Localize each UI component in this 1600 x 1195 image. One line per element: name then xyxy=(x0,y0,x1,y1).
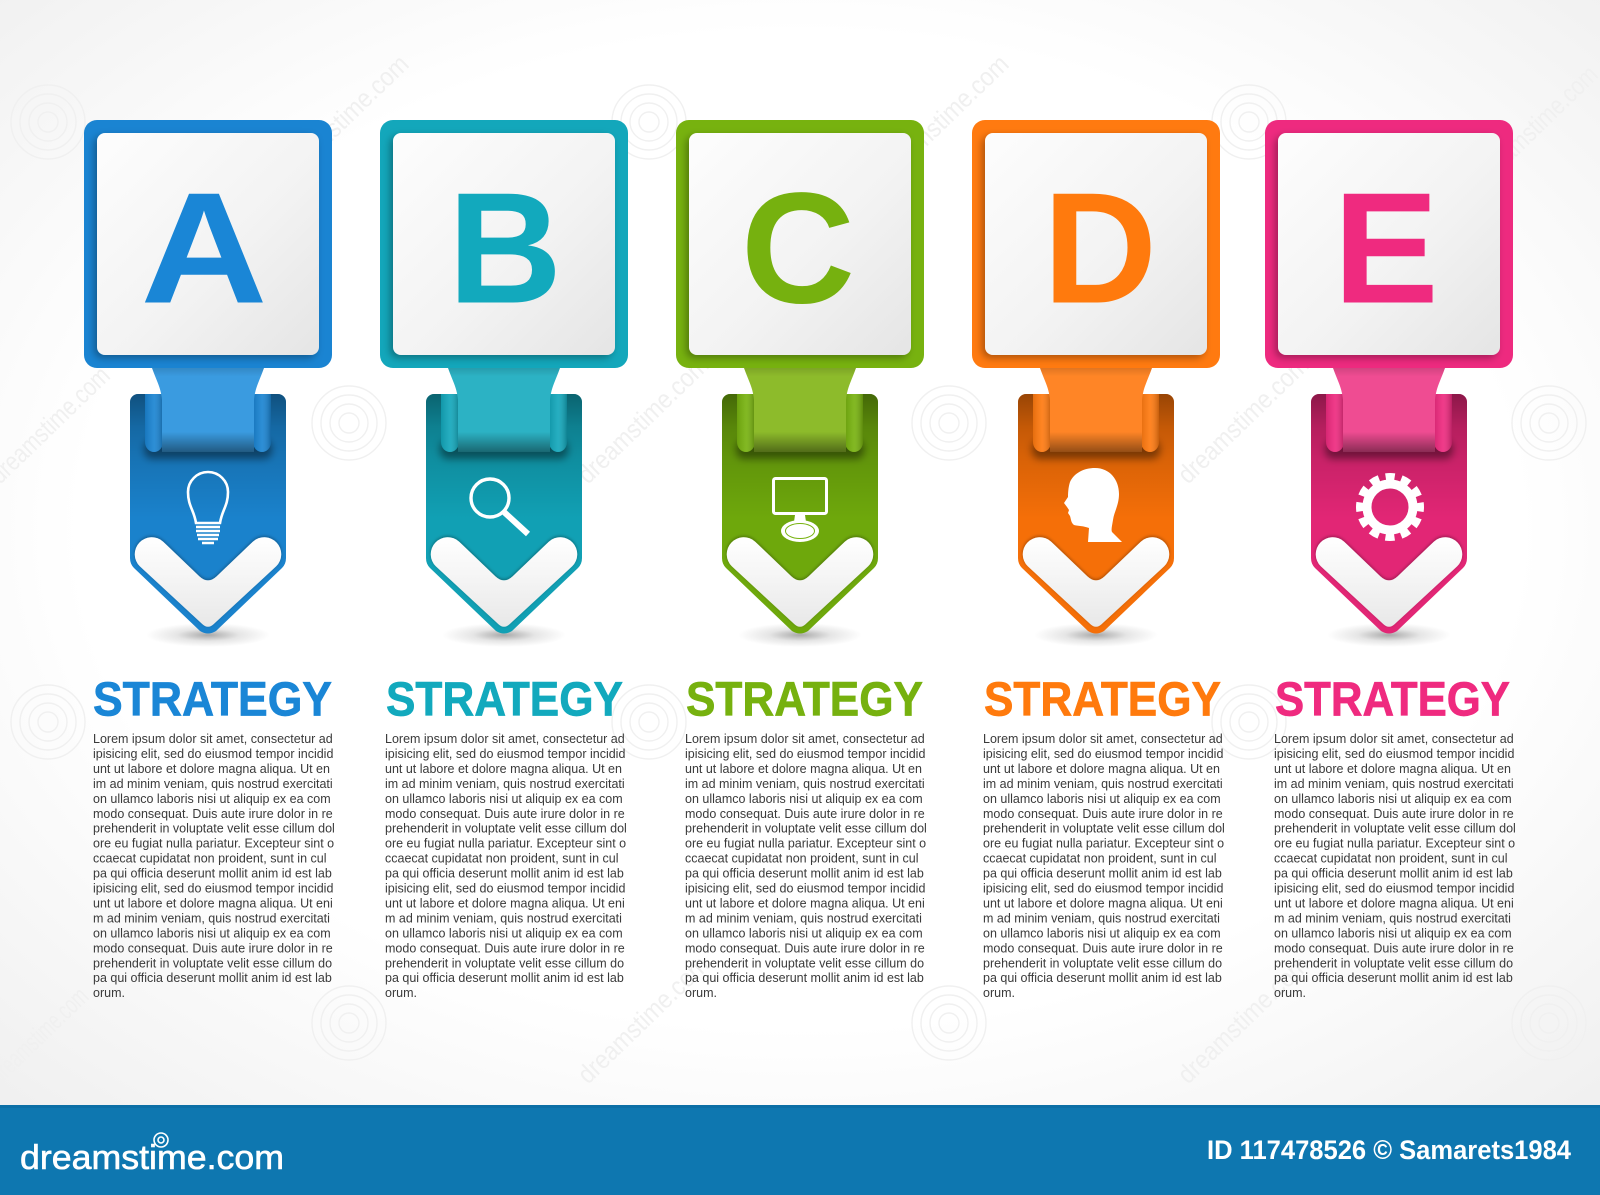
body text: pa qui officia deserunt mollit anim id est lab xyxy=(385,867,624,881)
icon: gear xyxy=(1360,477,1420,537)
footer bar xyxy=(0,1105,1600,1195)
body text: pa qui officia deserunt mollit anim id est lab xyxy=(93,971,332,985)
body text: ipisicing elit, sed do eiusmod tempor incidid xyxy=(1274,882,1514,896)
body text: orum. xyxy=(93,986,125,1000)
watermark text: dreamstime.com xyxy=(871,49,1014,188)
heading: STRATEGY xyxy=(1275,674,1510,726)
letter B: B xyxy=(448,160,562,336)
body text: modo consequat. Duis aute irure dolor in re xyxy=(983,941,1223,955)
icon: monitor xyxy=(774,478,826,542)
body text: modo consequat. Duis aute irure dolor in re xyxy=(983,807,1223,821)
letter E: E xyxy=(1333,160,1439,336)
body text: on ullamco laboris nisi ut aliquip ex ea com xyxy=(1274,926,1512,940)
body text: ipisicing elit, sed do eiusmod tempor incidid xyxy=(385,882,625,896)
body text: pa qui officia deserunt mollit anim id est lab xyxy=(983,867,1222,881)
body text: prehenderit in voluptate velit esse cillum dol xyxy=(1274,822,1516,836)
heading: STRATEGY xyxy=(984,674,1221,726)
body text: m ad minim veniam, quis nostrud exercitati xyxy=(93,911,330,925)
watermark text: dreamstime.com xyxy=(571,350,714,489)
body text: ore eu fugiat nulla pariatur. Excepteur sint o xyxy=(93,837,334,851)
body text: unt ut labore et dolore magna aliqua. Ut eni xyxy=(93,896,333,910)
watermark text: dreamstime.com xyxy=(1171,950,1314,1089)
icon: person head xyxy=(1064,468,1122,542)
body text: m ad minim veniam, quis nostrud exercitati xyxy=(385,911,622,925)
body text: modo consequat. Duis aute irure dolor in re xyxy=(1274,807,1514,821)
body text: orum. xyxy=(983,986,1015,1000)
body text: modo consequat. Duis aute irure dolor in re xyxy=(93,807,333,821)
body text: prehenderit in voluptate velit esse cillum dol xyxy=(983,822,1225,836)
heading: STRATEGY xyxy=(386,674,623,726)
body text: pa qui officia deserunt mollit anim id est lab xyxy=(385,971,624,985)
body text: on ullamco laboris nisi ut aliquip ex ea com xyxy=(93,792,331,806)
panel: A xyxy=(84,120,335,1000)
body text: prehenderit in voluptate velit esse cillum dol xyxy=(685,822,927,836)
body text: ccaecat cupidatat non proident, sunt in cul xyxy=(93,852,326,866)
heading: STRATEGY xyxy=(686,674,923,726)
watermark text: dreamstime.com xyxy=(571,950,714,1089)
body text: on ullamco laboris nisi ut aliquip ex ea com xyxy=(685,792,923,806)
panel: D xyxy=(972,120,1225,1000)
body text: ipisicing elit, sed do eiusmod tempor incidid xyxy=(93,882,333,896)
arrow tag C xyxy=(676,120,924,647)
body text: ccaecat cupidatat non proident, sunt in cul xyxy=(1274,852,1507,866)
letter C: C xyxy=(741,160,855,336)
body text: im ad minim veniam, quis nostrud exercitati xyxy=(685,777,925,791)
body text: modo consequat. Duis aute irure dolor in re xyxy=(685,941,925,955)
body text: Lorem ipsum dolor sit amet, consectetur ad xyxy=(685,732,925,746)
body text: im ad minim veniam, quis nostrud exercitati xyxy=(93,777,333,791)
heading: STRATEGY xyxy=(93,674,332,726)
arrow tag E xyxy=(1265,120,1513,647)
body text: on ullamco laboris nisi ut aliquip ex ea com xyxy=(983,926,1221,940)
body text: Lorem ipsum dolor sit amet, consectetur ad xyxy=(93,732,333,746)
logo spiral xyxy=(154,1133,168,1147)
body text: prehenderit in voluptate velit esse cillum dol xyxy=(385,822,627,836)
panel: C xyxy=(676,120,927,1000)
body text: im ad minim veniam, quis nostrud exercitati xyxy=(983,777,1223,791)
body text: on ullamco laboris nisi ut aliquip ex ea com xyxy=(93,926,331,940)
body text: prehenderit in voluptate velit esse cillum do xyxy=(385,956,624,970)
body text: ipisicing elit, sed do eiusmod tempor incidid xyxy=(983,882,1223,896)
body text: modo consequat. Duis aute irure dolor in re xyxy=(93,941,333,955)
watermark text: dreamstime.com xyxy=(1171,350,1314,489)
body text: unt ut labore et dolore magna aliqua. Ut en xyxy=(385,762,622,776)
body text: prehenderit in voluptate velit esse cillum do xyxy=(1274,956,1513,970)
body text: ipisicing elit, sed do eiusmod tempor incidid xyxy=(983,747,1223,761)
body text: unt ut labore et dolore magna aliqua. Ut en xyxy=(93,762,330,776)
body text: pa qui officia deserunt mollit anim id est lab xyxy=(93,867,332,881)
body text: Lorem ipsum dolor sit amet, consectetur ad xyxy=(385,732,625,746)
body text: ipisicing elit, sed do eiusmod tempor incidid xyxy=(685,882,925,896)
body text: on ullamco laboris nisi ut aliquip ex ea com xyxy=(385,926,623,940)
body text: modo consequat. Duis aute irure dolor in re xyxy=(685,807,925,821)
body text: ccaecat cupidatat non proident, sunt in cul xyxy=(685,852,918,866)
body text: prehenderit in voluptate velit esse cillum do xyxy=(93,956,332,970)
body text: ipisicing elit, sed do eiusmod tempor incidid xyxy=(93,747,333,761)
body text: on ullamco laboris nisi ut aliquip ex ea com xyxy=(983,792,1221,806)
body text: unt ut labore et dolore magna aliqua. Ut en xyxy=(983,762,1220,776)
footer credit: ID 117478526 © Samarets1984 xyxy=(1207,1135,1571,1165)
body text: prehenderit in voluptate velit esse cillum do xyxy=(685,956,924,970)
body text: modo consequat. Duis aute irure dolor in re xyxy=(385,807,625,821)
body text: modo consequat. Duis aute irure dolor in re xyxy=(1274,941,1514,955)
body text: ccaecat cupidatat non proident, sunt in cul xyxy=(983,852,1216,866)
body text: unt ut labore et dolore magna aliqua. Ut eni xyxy=(983,896,1223,910)
body text: pa qui officia deserunt mollit anim id est lab xyxy=(685,971,924,985)
arrow tag B xyxy=(380,120,628,647)
body text: on ullamco laboris nisi ut aliquip ex ea com xyxy=(385,792,623,806)
arrow tag A xyxy=(84,120,332,647)
letter D: D xyxy=(1043,160,1157,336)
body text: ore eu fugiat nulla pariatur. Excepteur sint o xyxy=(1274,837,1515,851)
body text: orum. xyxy=(685,986,717,1000)
body text: ipisicing elit, sed do eiusmod tempor incidid xyxy=(1274,747,1514,761)
body text: m ad minim veniam, quis nostrud exercitati xyxy=(685,911,922,925)
body text: ore eu fugiat nulla pariatur. Excepteur sint o xyxy=(685,837,926,851)
icon: magnifier xyxy=(471,479,528,534)
body text: unt ut labore et dolore magna aliqua. Ut en xyxy=(1274,762,1511,776)
body text: unt ut labore et dolore magna aliqua. Ut eni xyxy=(385,896,625,910)
body text: Lorem ipsum dolor sit amet, consectetur ad xyxy=(983,732,1223,746)
body text: on ullamco laboris nisi ut aliquip ex ea com xyxy=(685,926,923,940)
body text: unt ut labore et dolore magna aliqua. Ut en xyxy=(685,762,922,776)
body text: modo consequat. Duis aute irure dolor in re xyxy=(385,941,625,955)
body text: orum. xyxy=(385,986,417,1000)
body text: im ad minim veniam, quis nostrud exercitati xyxy=(1274,777,1514,791)
body text: ore eu fugiat nulla pariatur. Excepteur sint o xyxy=(385,837,626,851)
panel: B xyxy=(380,120,628,1000)
body text: pa qui officia deserunt mollit anim id est lab xyxy=(983,971,1222,985)
body text: ipisicing elit, sed do eiusmod tempor incidid xyxy=(685,747,925,761)
body text: unt ut labore et dolore magna aliqua. Ut eni xyxy=(1274,896,1514,910)
body text: ccaecat cupidatat non proident, sunt in cul xyxy=(385,852,618,866)
letter A: A xyxy=(140,160,268,336)
body text: m ad minim veniam, quis nostrud exercitati xyxy=(983,911,1220,925)
body text: ipisicing elit, sed do eiusmod tempor incidid xyxy=(385,747,625,761)
body text: ore eu fugiat nulla pariatur. Excepteur sint o xyxy=(983,837,1224,851)
body text: orum. xyxy=(1274,986,1306,1000)
body text: pa qui officia deserunt mollit anim id est lab xyxy=(1274,867,1513,881)
arrow tag D xyxy=(972,120,1220,647)
body text: pa qui officia deserunt mollit anim id est lab xyxy=(1274,971,1513,985)
body text: prehenderit in voluptate velit esse cillum do xyxy=(983,956,1222,970)
body text: pa qui officia deserunt mollit anim id est lab xyxy=(685,867,924,881)
footer logo: dreamstime.com xyxy=(20,1139,284,1177)
body text: m ad minim veniam, quis nostrud exercitati xyxy=(1274,911,1511,925)
body text: on ullamco laboris nisi ut aliquip ex ea com xyxy=(1274,792,1512,806)
body text: Lorem ipsum dolor sit amet, consectetur ad xyxy=(1274,732,1514,746)
body text: prehenderit in voluptate velit esse cillum dol xyxy=(93,822,335,836)
panel: E xyxy=(1265,120,1516,1000)
body text: unt ut labore et dolore magna aliqua. Ut eni xyxy=(685,896,925,910)
icon: light bulb xyxy=(188,472,228,543)
watermark text: dreamstime.com xyxy=(271,49,414,188)
body text: im ad minim veniam, quis nostrud exercitati xyxy=(385,777,625,791)
